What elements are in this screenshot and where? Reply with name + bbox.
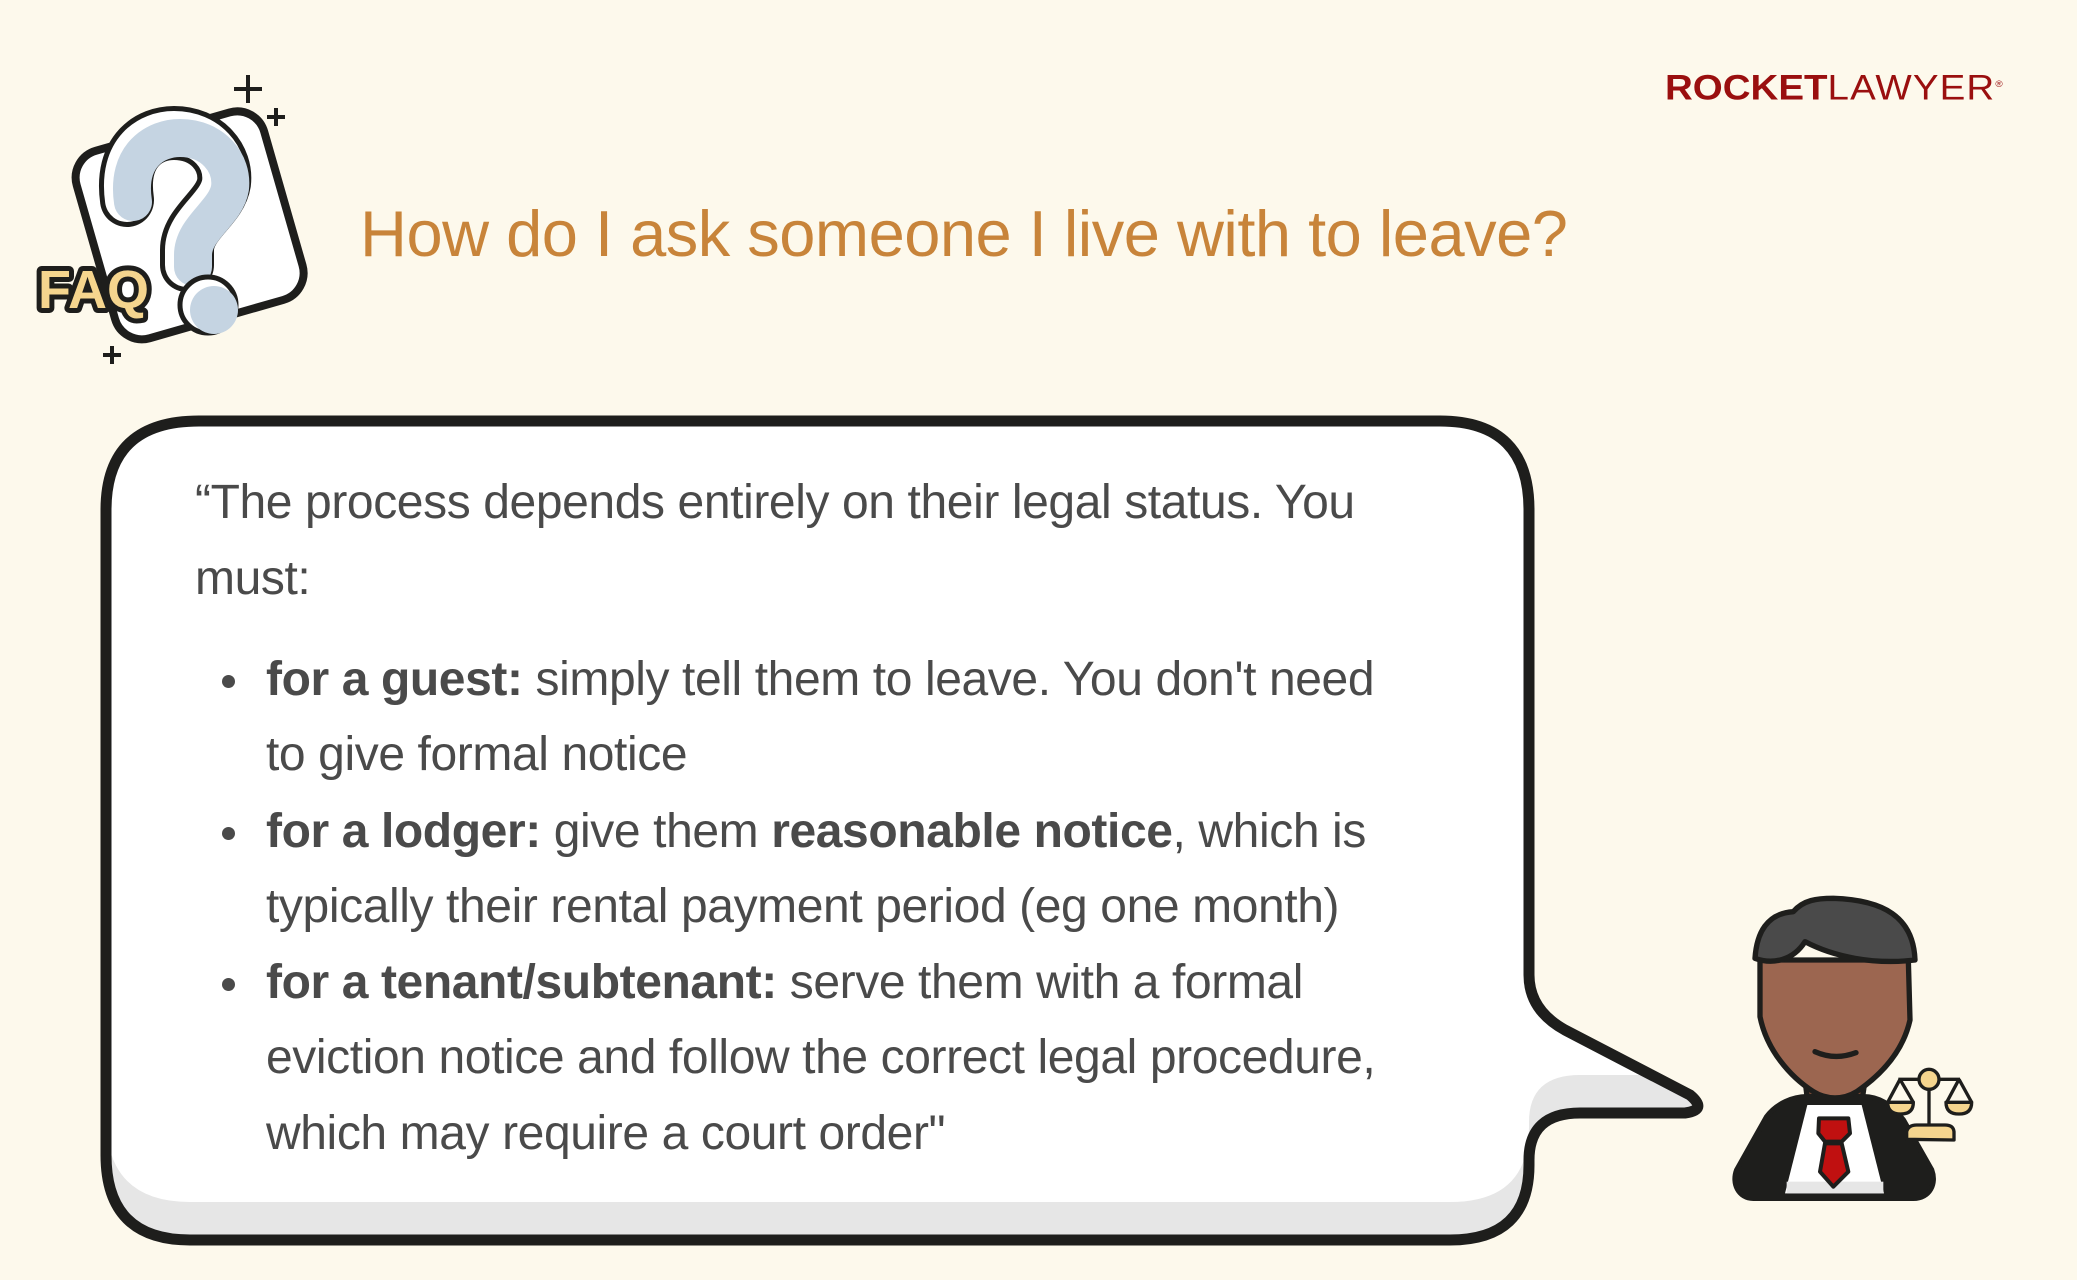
title: How do I ask someone I live with to leave?	[360, 197, 1567, 270]
bullet: lodger	[222, 827, 235, 840]
quote text: eviction notice and follow the correct legal procedure,	[266, 1031, 1375, 1084]
icon: lawyer with scales	[1732, 896, 1974, 1201]
sparkles	[105, 77, 283, 362]
quote text: must:	[195, 552, 310, 605]
speech bubble	[100, 416, 1704, 1246]
bullet: tenant	[222, 978, 235, 991]
quote text: “The process depends entirely on their legal status. You	[195, 476, 1355, 529]
quote text: for a guest: simply tell them to leave. You don't need	[266, 653, 1374, 706]
quote text: for a tenant/subtenant: serve them with a formal	[266, 956, 1303, 1009]
icon: FAQ question mark	[36, 75, 308, 364]
quote text	[195, 476, 1375, 1160]
quote text: for a lodger: give them reasonable notice, which is	[266, 805, 1366, 858]
icon: FAQ question mark: FAQ	[38, 260, 149, 320]
quote text: which may require a court order"	[266, 1107, 945, 1160]
bullet: guest	[222, 675, 235, 688]
logo: Rocket Lawyer: ROCKETLAWYER®	[1665, 69, 2003, 108]
quote text: typically their rental payment period (eg one month)	[266, 880, 1339, 933]
quote text: to give formal notice	[266, 728, 687, 781]
